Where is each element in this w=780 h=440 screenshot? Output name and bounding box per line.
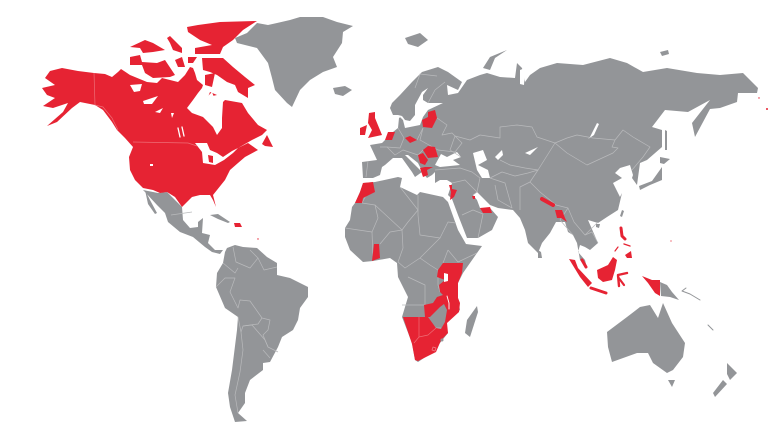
highlighted: Southern Africa bbox=[403, 317, 444, 361]
Great Lakes and inland water bbox=[130, 84, 238, 166]
Greenland and Iceland bbox=[235, 17, 353, 107]
Africa landmass bbox=[345, 177, 482, 362]
inland seas and lakes bbox=[400, 68, 599, 178]
highlighted: Nepal and Bangladesh bbox=[542, 199, 567, 222]
highlighted: United Kingdom and Ireland bbox=[360, 112, 382, 138]
Eurasia landmass bbox=[362, 58, 758, 268]
Americas landmass bbox=[143, 190, 308, 422]
highlighted: Ghana bbox=[372, 244, 380, 261]
highlighted: small Pacific islands bbox=[257, 97, 768, 242]
highlighted: East Africa bbox=[424, 263, 463, 340]
highlighted: Indonesia, Malaysia and Philippines bbox=[569, 228, 660, 296]
highlighted: Dominican Republic bbox=[234, 223, 242, 227]
highlighted: Morocco bbox=[355, 182, 375, 203]
northern and Asian islands bbox=[210, 33, 670, 258]
country borders bbox=[171, 74, 650, 413]
Arctic islands bbox=[130, 21, 257, 98]
Australia and Pacific bbox=[607, 282, 737, 397]
highlighted: Middle East bbox=[449, 185, 492, 213]
highlighted: Canada, USA and Alaska bbox=[42, 21, 273, 207]
highlighted: European countries bbox=[385, 110, 438, 177]
